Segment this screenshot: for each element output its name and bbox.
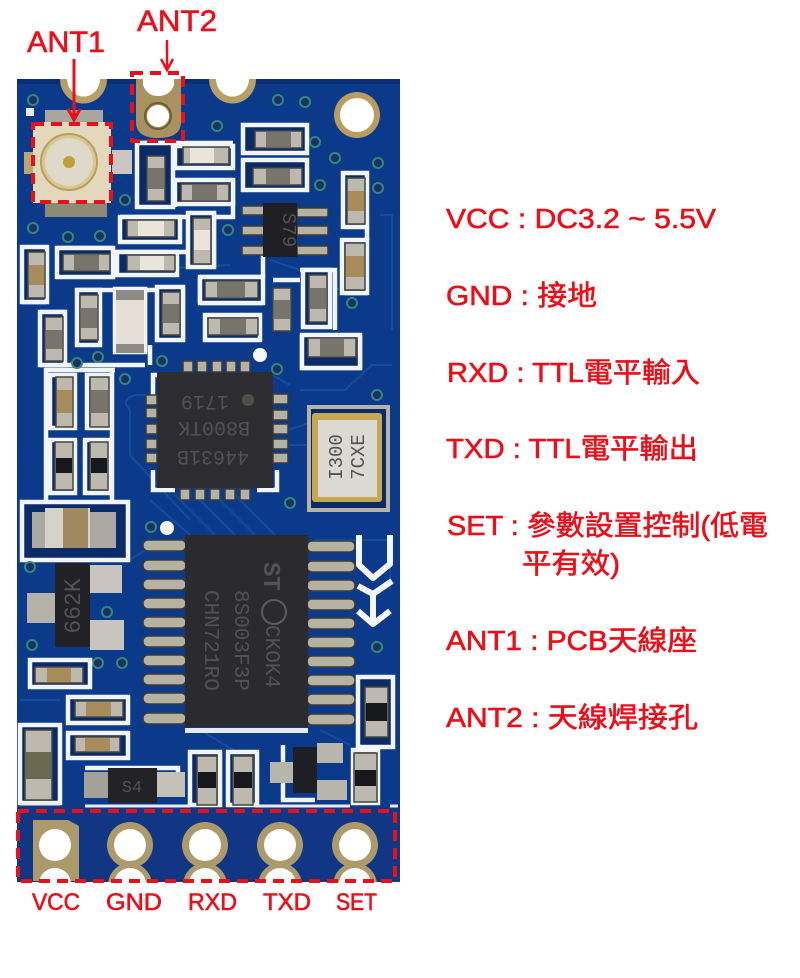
mounting hole <box>334 92 380 138</box>
ANT1 description: ANT1 : PCB天線座 <box>446 625 697 656</box>
TSSOP microcontroller: CKOK4 <box>259 625 282 688</box>
SOT regulator 662K <box>27 563 124 650</box>
QFN radio chip: 44631B <box>177 444 249 467</box>
SOT regulator S79 <box>242 203 328 257</box>
large capacitor <box>22 502 128 560</box>
large white capacitor <box>115 289 145 353</box>
TXD description: TXD : TTL電平輸出 <box>446 433 698 464</box>
TSSOP microcontroller <box>143 535 355 733</box>
ANT2 description: ANT2 : 天線焊接孔 <box>446 702 698 733</box>
SET description: 平有效) <box>522 548 620 579</box>
pin labels: GND <box>106 889 162 916</box>
VCC description: VCC : DC3.2 ~ 5.5V <box>446 203 716 234</box>
pin header pads <box>10 804 410 912</box>
crystal oscillator <box>309 407 388 510</box>
TSSOP microcontroller: CHN721RO <box>198 590 221 691</box>
RXD description: RXD : TTL電平輸入 <box>447 357 700 388</box>
pin labels: TXD <box>263 889 311 916</box>
pin labels: SET <box>336 889 377 916</box>
pin labels: RXD <box>188 889 237 916</box>
ANT2 label: ANT2 <box>137 5 217 38</box>
module circuit board <box>10 72 410 912</box>
arrow: ANT2 <box>161 40 173 70</box>
vias <box>25 95 383 668</box>
KC mark <box>358 535 392 624</box>
SET description: SET : 參數設置控制(低電 <box>447 510 768 541</box>
diode S4: S4 <box>122 779 142 798</box>
pin labels: VCC <box>32 889 80 916</box>
capacitors and resistors <box>22 125 367 493</box>
pin description list <box>446 203 768 733</box>
ANT1 antenna connector <box>24 110 132 217</box>
crystal oscillator: 7CXE <box>348 434 370 480</box>
SOT regulator S79: S79 <box>277 213 299 247</box>
diode S4 <box>84 768 185 803</box>
SOT regulator 662K: 662K <box>61 578 87 634</box>
ANT1 label: ANT1 <box>27 26 105 59</box>
GND description: GND : 接地 <box>446 280 597 311</box>
SET description <box>447 510 768 579</box>
QFN radio chip: B800TK <box>178 415 250 438</box>
crystal oscillator: I300 <box>326 434 348 480</box>
QFN radio chip: 1719 <box>181 389 229 412</box>
TSSOP microcontroller: ST <box>256 562 283 591</box>
ANT1 dashed highlight <box>33 124 111 202</box>
top edge half holes <box>60 79 256 104</box>
pin header dashed highlight <box>18 811 395 881</box>
lower components <box>20 660 393 805</box>
QFN radio chip <box>146 361 288 500</box>
transistor <box>270 743 347 800</box>
pin labels <box>32 889 377 916</box>
ANT2 solder pad <box>136 72 181 138</box>
ANT2 dashed highlight <box>132 73 183 141</box>
arrow: ANT1 <box>68 59 80 120</box>
TSSOP microcontroller: 8S003F3P <box>228 590 251 691</box>
